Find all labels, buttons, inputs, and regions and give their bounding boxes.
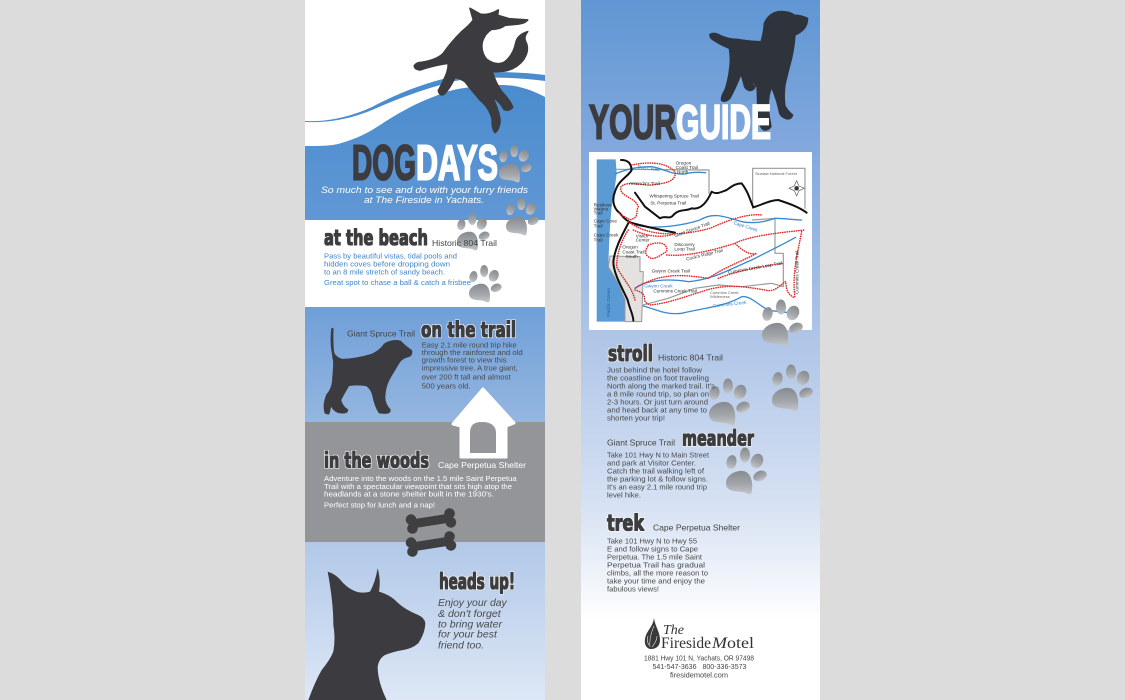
heading: heads up: heads up! (439, 570, 515, 595)
logo script word: The (663, 623, 684, 638)
heads up message: to bring water (438, 618, 502, 630)
heads up message: for your best (438, 629, 498, 641)
icon: paw print (708, 378, 751, 425)
section: meander (607, 427, 754, 499)
map labels: Giant Spruce Trail (674, 221, 710, 238)
trek description: take your time and enjoy the (607, 577, 705, 586)
meander description: the parking lot & follow signs. (607, 474, 708, 483)
section: stroll (607, 342, 723, 422)
stroll description: Just behind the hotel follow (607, 365, 703, 374)
blue wave header (305, 85, 545, 220)
trail description: 500 years old. (422, 381, 471, 390)
icon: paw print (498, 145, 533, 182)
meander description: It's an easy 2.1 mile round trip (607, 482, 707, 491)
meander description: Catch the trail walking left of (607, 466, 705, 475)
heading: on the trail: on the trail (421, 318, 516, 342)
title word: guide: GUIDE (676, 96, 771, 150)
trail map (594, 159, 807, 322)
ocean (597, 159, 625, 322)
map labels: Visitor (636, 233, 649, 238)
map labels: Cape Creek (594, 233, 619, 238)
trail name: Historic 804 Trail (432, 238, 497, 248)
meander description: and park at Visitor Center. (607, 458, 696, 467)
panel background (581, 0, 820, 700)
map panel (589, 152, 812, 330)
map labels: St. Perpetua Trail (650, 200, 686, 205)
map labels: South (626, 254, 638, 259)
icon: bone (405, 507, 457, 535)
logo name: motel: Motel (711, 635, 755, 652)
trek description (607, 537, 708, 594)
map labels: North (677, 169, 689, 174)
icon: paw print (505, 198, 540, 235)
rivers (615, 167, 802, 314)
heading: in the woods: in the woods (324, 448, 429, 472)
section background (305, 307, 545, 422)
trail name: Giant Spruce Trail (347, 329, 415, 339)
stroll description (607, 365, 715, 422)
map labels: Cook's Ridge Trail (686, 248, 723, 262)
map labels: Trail (594, 223, 603, 228)
heading: stroll: stroll (608, 342, 653, 367)
woods description: Adventure into the woods on the 1.5 mile Saint Perpetua (324, 474, 517, 483)
map labels: Cape Creek (733, 220, 759, 233)
section background (305, 542, 545, 700)
trek description: Perpetua. The 1.5 mile Saint (607, 553, 703, 562)
map labels: Amanda's Trail (629, 181, 660, 186)
contact details: 1881 Hwy 101 N, Yachats, OR 97498 (644, 654, 754, 663)
section: in the woods (305, 389, 545, 542)
stroll description: 2-3 hours. Or just turn around (607, 397, 708, 406)
stroll description: North along the marked trail. It's (607, 381, 715, 390)
map labels: Oregon (676, 161, 692, 166)
woods description: Trail with a spectacular viewpoint that sits high atop the (324, 482, 512, 491)
trail description (422, 340, 523, 390)
map background (589, 152, 812, 330)
map labels: Pacific Ocean (606, 288, 611, 317)
beach description (324, 252, 471, 287)
map labels: Cummins Creek (713, 300, 747, 308)
map labels: Trail (594, 237, 603, 242)
woods description: headlands at a stone shelter built in the 1930's. (324, 489, 494, 498)
logo: the fireside motel (645, 618, 755, 652)
map labels: Center (636, 238, 650, 243)
subtitle: at The Fireside in Yachats. (364, 195, 484, 205)
section: on the trail (305, 307, 545, 422)
trek description: fabulous views! (607, 585, 659, 594)
heading: meander: meander (682, 427, 754, 451)
title: dog days (352, 136, 498, 190)
map labels: Restless (594, 203, 612, 208)
beach description: hidden coves before dropping down (324, 260, 450, 269)
heads up message: friend too. (438, 639, 484, 651)
section background (305, 422, 545, 542)
icon: paw print (771, 364, 814, 411)
heads up message: & don't forget (438, 608, 502, 620)
icon: bone (405, 530, 457, 558)
panel background (305, 0, 545, 700)
trek description: Take 101 Hwy N to Hwy 55 (607, 537, 697, 546)
beach description: Pass by beautiful vistas, tidal pools and (324, 252, 457, 261)
trail name: Cape Perpetua Shelter (653, 523, 740, 533)
icon: paw print (468, 265, 503, 302)
map labels: Cummins Creek Trail (653, 288, 697, 293)
meander description: Take 101 Hwy N to Main Street (607, 450, 710, 459)
shelter name: Cape Perpetua Shelter (438, 460, 526, 470)
map labels: Whispering Spruce Trail (649, 194, 699, 199)
title: your guide (589, 96, 771, 150)
panel: your guide brochure (581, 0, 820, 700)
trek description: E and follow signs to Cape (607, 545, 698, 554)
title word: days: DAYS (416, 136, 498, 190)
trek description: climbs, all the more reason to (607, 569, 708, 578)
map labels (594, 161, 799, 317)
stroll description: and head back at any time to (607, 405, 707, 414)
panel: dog days brochure (305, 0, 545, 700)
stroll description: the coastline on foot traveling (607, 373, 709, 382)
heading: trek: trek (607, 512, 645, 537)
map labels: Wilderness (710, 294, 730, 299)
contact details (644, 654, 754, 680)
heads up message (438, 597, 507, 651)
forest boundary lines (616, 168, 805, 305)
icon: compass rose (789, 181, 804, 196)
trail name: Giant Spruce Trail (607, 438, 675, 448)
map labels: Siuslaw National Forest (755, 171, 798, 176)
trail name: Historic 804 Trail (658, 353, 723, 363)
trail description: growth forest to view this (422, 356, 507, 365)
thin swoosh line (305, 72, 545, 122)
contact details: firesidemotel.com (670, 671, 728, 680)
map labels: Oregon (622, 245, 638, 250)
trail description: impressive tree. A true giant, (422, 364, 518, 373)
icon: labrador silhouette (710, 11, 808, 130)
red dotted trails (617, 163, 805, 305)
section: trek (607, 512, 740, 594)
meander description (607, 450, 710, 499)
map labels: Coast Trail (622, 249, 645, 254)
contact details: 541-547-3636 800-336-3573 (652, 662, 746, 671)
icon: standing beagle (325, 329, 411, 413)
map labels: Cape Cove (594, 219, 617, 224)
logo name: Fireside (661, 635, 711, 652)
meander description: level hike. (607, 490, 641, 499)
stroll description: shorten your trip! (607, 413, 665, 422)
map labels: Trail (594, 211, 603, 216)
icon: white dog house (453, 389, 514, 457)
map labels: Cummins Creek Trail (794, 251, 799, 294)
subtitle (321, 185, 529, 205)
section: heads up (305, 542, 545, 700)
woods description: Perfect stop for lunch and a nap! (324, 500, 435, 509)
trail description: Easy 2.1 mile round trip hike (422, 340, 517, 349)
title word: dog: DOG (352, 136, 416, 190)
map labels: Cummins Creek Loop Trail (728, 260, 783, 275)
icon: jumping dog with frisbee (414, 8, 528, 133)
state park area (608, 256, 643, 322)
map labels: Discovery (674, 242, 695, 247)
icon: paw print (725, 448, 768, 494)
icon: paw print (456, 213, 491, 250)
map labels: Waters (594, 207, 609, 212)
trek description: Perpetua Trail has gradual (607, 561, 705, 570)
beach description: Great spot to chase a ball & catch a frisbee (324, 278, 471, 287)
heads up message: Enjoy your day (438, 597, 507, 609)
beach description: to an 8 mile stretch of sandy beach. (324, 268, 445, 277)
map labels: Cummins Creek (710, 290, 739, 295)
subtitle: So much to see and do with your furry friends (321, 185, 529, 195)
icon: paw print (761, 300, 804, 346)
woods description (324, 474, 517, 509)
map labels: Bob Creek (638, 164, 661, 172)
map labels: Coast Trail (676, 165, 698, 170)
icon: great dane silhouette (308, 568, 425, 700)
map labels: Loop Trail (674, 247, 695, 252)
section: at the beach (324, 226, 497, 287)
trail description: over 200 ft tall and almost (422, 372, 512, 381)
trail description: through the rainforest and old (422, 348, 523, 357)
heading: at the beach: at the beach (324, 226, 428, 250)
map labels: Gwynn Creek Trail (652, 268, 690, 273)
stroll description: a 8 mile round trip, so plan on (607, 389, 709, 398)
icon: flame (645, 618, 660, 649)
title word: your: YOUR (589, 96, 676, 150)
map labels: Gwynn Creek (644, 283, 673, 288)
roads (613, 160, 807, 321)
